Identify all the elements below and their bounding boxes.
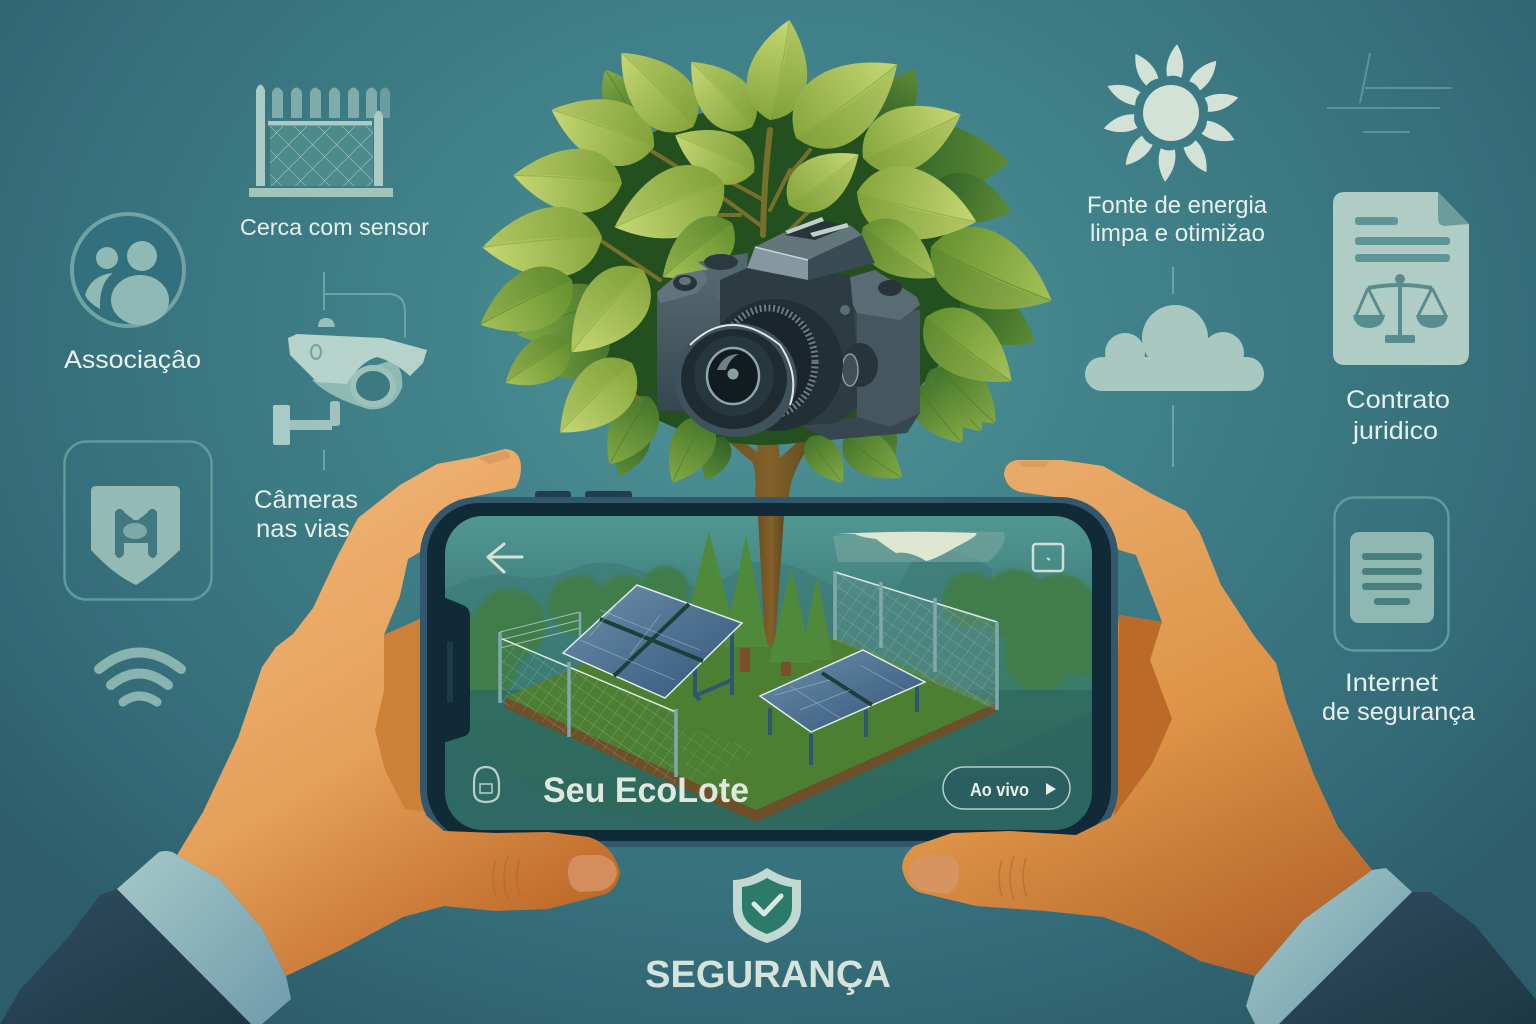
label: internet	[1322, 669, 1475, 726]
right arm sleeve	[1246, 868, 1536, 1024]
icon: association	[72, 214, 184, 326]
icon: shield badge	[64, 442, 212, 600]
right block	[800, 310, 920, 440]
icon: fence with sensor	[249, 84, 393, 197]
label: cameras: nas vias	[256, 515, 350, 543]
icon: sun	[1102, 44, 1240, 182]
right fingers front	[902, 816, 1150, 917]
ground platform	[838, 638, 964, 690]
label: cameras: Câmeras	[254, 486, 358, 514]
solar panel two	[770, 682, 917, 765]
side knob	[842, 343, 878, 387]
left arm sleeve	[0, 851, 291, 1024]
icon: back arrow	[488, 544, 522, 572]
left hand	[177, 449, 521, 976]
label: internet: de segurança	[1322, 698, 1475, 726]
left fingers front	[380, 812, 620, 917]
label: clean energy	[1087, 192, 1268, 247]
background woods	[470, 564, 1092, 690]
foliage mass	[560, 105, 970, 445]
veil and mountain	[833, 532, 1005, 562]
right hand	[1004, 460, 1372, 976]
phone	[420, 491, 1121, 847]
left fence	[500, 612, 580, 648]
tree	[468, 14, 1068, 497]
icon: security camera	[273, 272, 427, 470]
icon: screen corner button	[1033, 544, 1063, 571]
lens barrel	[707, 299, 843, 431]
label: contract	[1346, 386, 1450, 445]
icon: lock	[474, 767, 499, 802]
screen title: Seu EcoLote	[543, 771, 749, 810]
dark lower fade	[445, 735, 700, 830]
icon: legal contract	[1333, 192, 1469, 365]
right fence	[835, 572, 997, 710]
phone screen	[431, 515, 1121, 830]
label: fence: Cerca com sensor	[240, 214, 429, 240]
tree trunk on screen	[758, 515, 784, 645]
phone buttons	[535, 491, 632, 499]
live button: Ao vivo	[970, 780, 1029, 800]
label: clean energy: limpa e otimižao	[1090, 220, 1265, 247]
label: contract: juridico	[1352, 417, 1438, 445]
center body	[720, 268, 857, 427]
hot shoe	[785, 220, 850, 240]
live button	[943, 767, 1070, 809]
shaded inner fingers	[375, 619, 428, 812]
phone notch	[442, 598, 470, 742]
left grip	[657, 270, 727, 412]
label: internet: Internet	[1345, 669, 1438, 697]
front leaves	[540, 81, 665, 178]
prism	[755, 225, 862, 260]
icon: wifi	[99, 652, 181, 702]
shaded inner fingers	[1114, 615, 1172, 816]
icon: shield check	[733, 868, 801, 943]
rear leaves	[886, 123, 1010, 197]
icon: internet document	[1334, 498, 1448, 650]
conifers	[687, 532, 833, 663]
decoration lines top right	[1327, 53, 1452, 132]
camera	[657, 217, 920, 440]
branches	[600, 130, 830, 400]
label: association: Associaçâo	[64, 346, 201, 374]
label: clean energy: Fonte de energia	[1087, 192, 1268, 219]
label: cameras	[254, 486, 358, 543]
lens front	[675, 323, 797, 437]
security title: SEGURANÇA	[645, 954, 891, 996]
label: contract: Contrato	[1346, 386, 1450, 414]
trunk above phone	[722, 432, 818, 497]
solar panel one	[695, 630, 732, 700]
icon: cloud	[1085, 267, 1264, 467]
phone body	[420, 497, 1118, 847]
